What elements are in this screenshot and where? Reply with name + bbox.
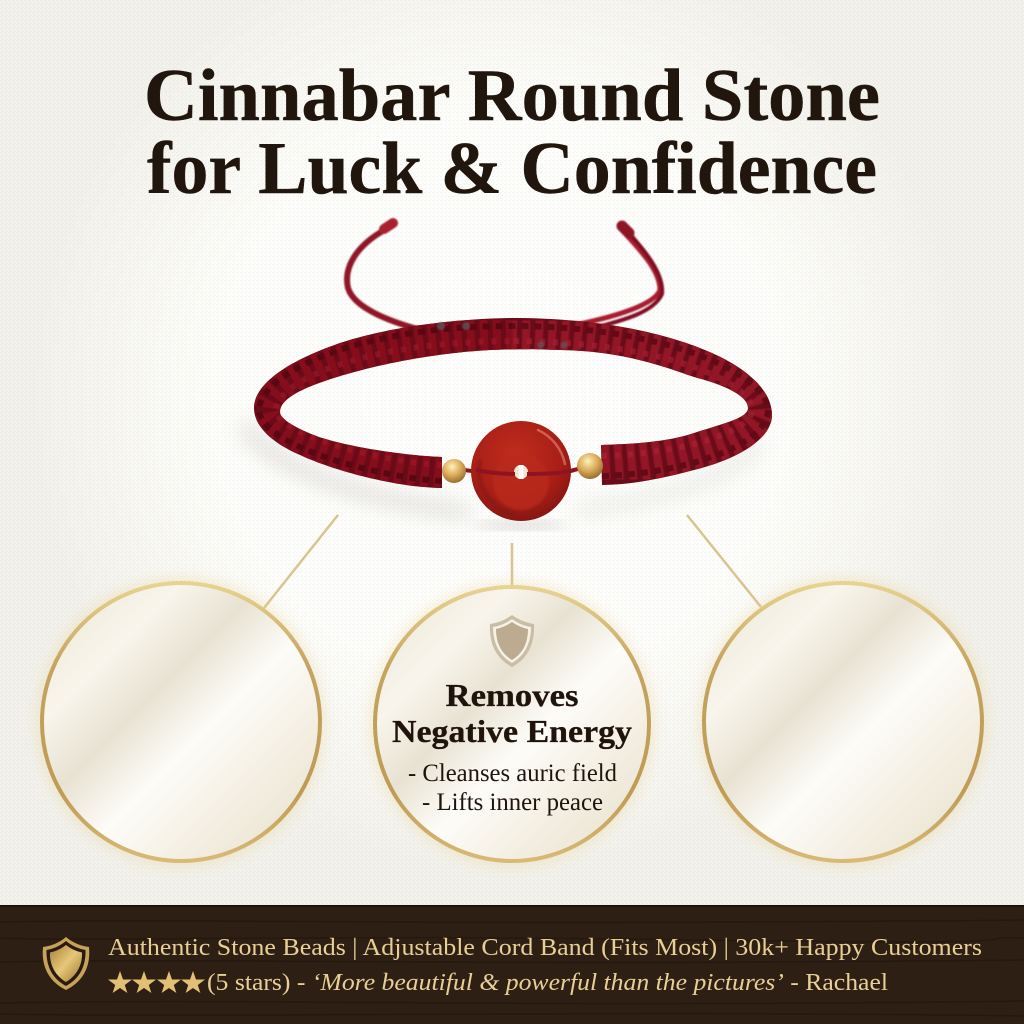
heading: removes negative energy [392,677,632,749]
panel: center medallion, removes negative energy [370,582,654,866]
braided band [254,318,772,488]
heading: removes negative energy: Negative Energy [392,713,632,749]
connector line center [511,543,513,586]
icon: gold shield [43,937,89,990]
knot stripes, left side [267,334,512,473]
upper knot row, right [512,341,752,456]
lower knot row, left [259,326,512,481]
icon: shield [490,615,534,667]
panel: left empty medallion [37,578,325,866]
benefit list: - Lifts inner peace [422,789,603,816]
panel: right empty medallion [699,578,987,866]
heading: removes negative energy: Removes [446,677,578,713]
benefit list [408,760,617,816]
adjustable cord ends [347,223,662,331]
upper knot row, left [276,341,512,465]
footer line: product features: Authentic Stone Beads | Adjustable Cord Band (Fits Most) | 30k+ Happy Customers [108,935,982,961]
footer line: customer quote: (5 stars) - ‘More beautiful & powerful than the pictures’ - Rachael [207,970,888,996]
product image: red cord bracelet [240,223,785,529]
title: Cinnabar Round Stone [144,55,880,137]
connector line right [687,515,761,607]
lower knot row, right [512,326,768,476]
icon: four rating stars [108,971,205,993]
cinnabar donut stone [471,421,574,529]
grey sliding knot flecks [437,322,568,348]
bracelet shadow [244,425,760,512]
title: for Luck & Confidence [147,128,877,210]
thin cord through stone, behind [464,468,582,472]
footer band: dark wood [0,905,1024,1024]
gold bead right [577,453,603,479]
title [144,55,880,210]
knot stripes, right side [512,334,760,466]
connector line left [264,515,338,608]
gold bead left [442,459,466,483]
benefit list: - Cleanses auric field [408,760,617,787]
